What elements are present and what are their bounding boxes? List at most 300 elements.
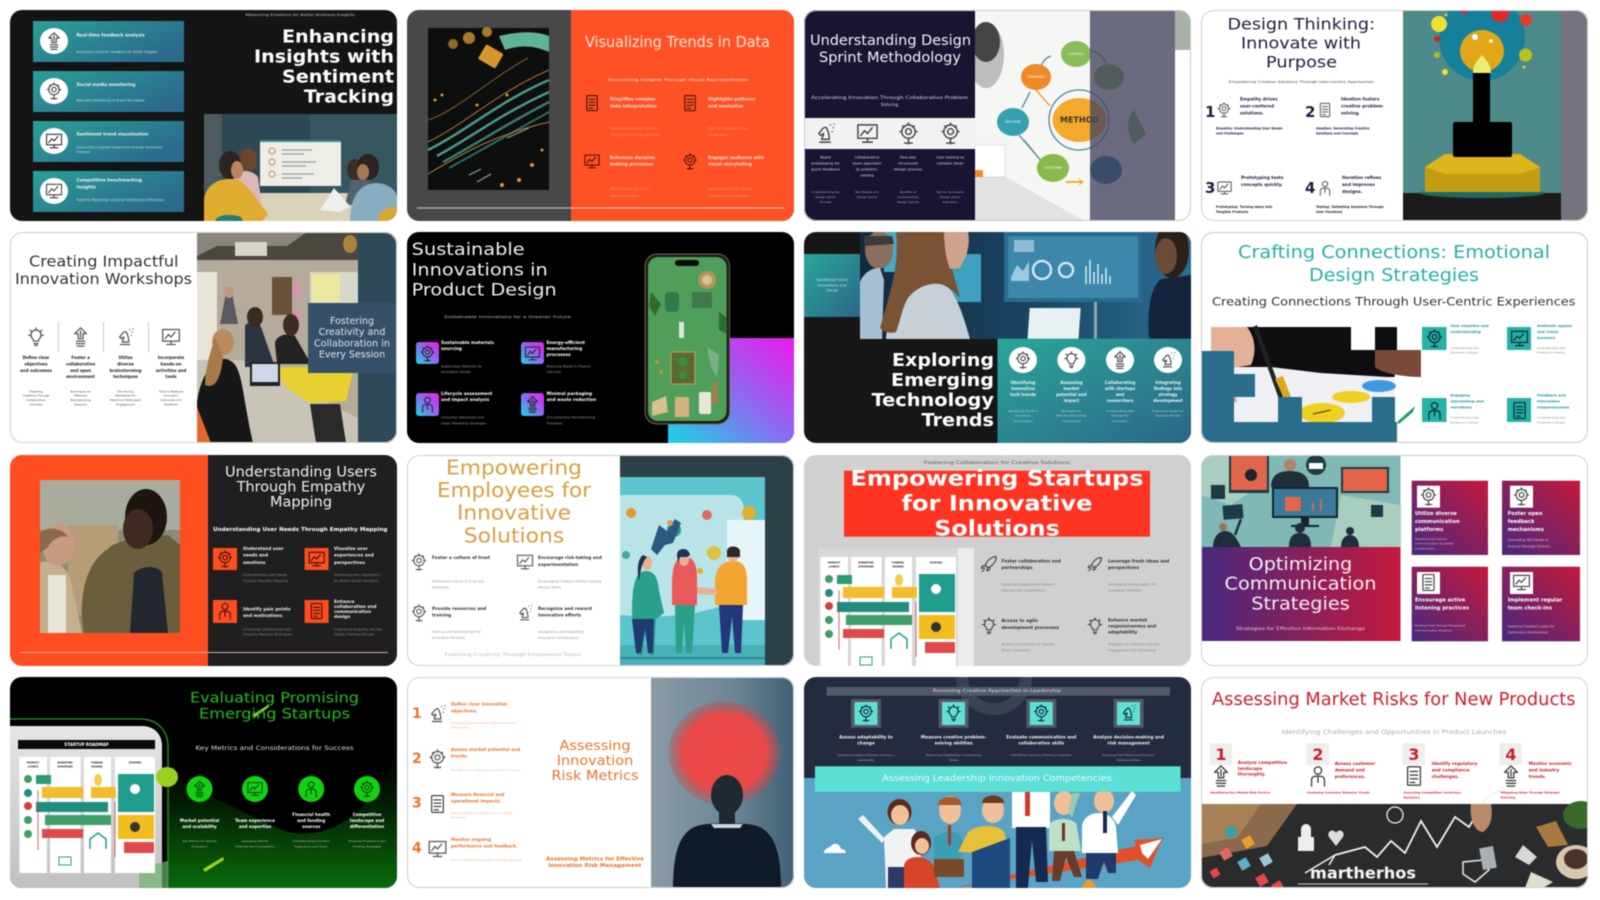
item 2 [235,776,275,849]
roadmap: ROUNDS [892,566,904,568]
item 3: Assessing Competitive Landscape [1404,791,1461,795]
item 1 [1205,96,1283,135]
item 3: collaboration skills [1018,740,1065,746]
item 2: solving. [1341,110,1360,116]
item 2: Effective Technology [1056,414,1087,418]
green wedge background [168,752,397,888]
item 3 [1105,347,1136,423]
item 1: Foster collaboration and [1002,558,1061,564]
item 2: potential and [1056,392,1087,397]
item 4: Enhance [334,599,355,605]
item sublabels: Tips for Successful [935,190,964,194]
item 2: Improve Message Delivery [1508,544,1550,548]
title: Sustainable [412,240,525,260]
item 2: Brainstorming [70,398,91,402]
roadmap: LAUNCH [829,566,839,568]
item 1: tech trends [1010,392,1037,397]
item: real-time feedback analysis: Analyzing Customer Feedback for Better Insights [76,50,157,54]
item 2: 2 [412,751,422,767]
item labels: structured [898,160,918,166]
man green [1049,819,1081,851]
item 3: 3 [1205,179,1215,197]
title: Purpose [1266,52,1337,72]
header bar: Assessing Creative Approaches in Leadership [933,688,1061,694]
item 1: Creativity Through [23,393,50,397]
item 4: 4 [412,841,422,857]
item 4 [1507,394,1570,424]
item 4: responsiveness and [1108,624,1156,630]
title: Risk Metrics [552,768,638,784]
item 4: hands-on [161,362,182,366]
item 4: Feedback and [1537,394,1566,398]
item 1 [1422,324,1489,355]
item 4: differentiation [350,824,384,829]
item 3: Dynamics [1404,795,1420,799]
item sublabels: Design Sprint [940,195,961,199]
item 2: 2 [1305,103,1315,121]
card: Understanding Users Through Empathy Mapping [10,455,397,666]
card: Crafting Connections [1201,232,1588,443]
man white centre [1012,792,1050,828]
title: Assessing Market Risks for New Products [1212,689,1576,710]
item 3: Green Marketing Strategies [441,421,487,425]
item: highlights patterns and anomalies: Highlights patterns [708,96,756,102]
subtitle: Sustainable Innovations for a Greener Future [444,314,572,319]
roadmap panel: STARTING [129,762,141,764]
item 2: experiences and [334,552,374,558]
title: Innovation Workshops [15,270,192,288]
title [872,350,994,431]
item 4: Testing: Validating Solutions Through [1316,205,1384,209]
photo: workshop [197,232,397,443]
item 4: team check-ins [1508,606,1552,612]
item 3: Maximum Participant [110,398,142,402]
item 3: Consumer Awareness and [441,416,484,420]
item 2 [1088,557,1169,592]
item 3 [292,776,330,849]
illustration: light bulb on pedestal [1403,0,1588,221]
title: Assessing [560,738,630,754]
item 4: and improves [1342,182,1375,188]
item: simplifies complex data interpretation [587,96,661,137]
item sublabels: Key Phases of a [855,190,879,194]
photo: method diagram: STARTING [1027,75,1045,79]
title: Employees for [437,478,592,502]
item 3: Building Trust Through Transparent [1415,624,1466,628]
title: Emerging [891,370,994,391]
item 1: Foster a culture of trust [432,555,490,561]
title [190,690,359,722]
callout: teal box: Trends [825,289,838,293]
item 4: Competitive [353,812,381,817]
title: Insights with [254,46,394,68]
photo: man facing red sphere [651,677,794,888]
photo: method diagram: METHOD [1060,116,1099,124]
item 3: Engagement [116,402,136,406]
item: real-time feedback analysis [33,21,184,62]
roadmap panel: PRODUCT [27,762,40,764]
item 3: Encourage active [1415,598,1466,604]
item: enhances decision-making processes [585,155,657,198]
item 2: Assess customer [1335,761,1376,767]
title: Innovative [457,501,571,525]
photo: team at dashboard [860,222,1191,339]
item: engages audience with visual storytelling [684,154,764,198]
item 2: Innovative Solutions [1108,588,1142,592]
item 4: Recognizing and Rewarding [538,630,584,634]
item 1: Assessing Creative Problem-Solving in [837,753,895,757]
title: Product Design [412,281,557,301]
roadmap panel: LAUNCH [28,766,38,768]
item 1: Innovative [1015,414,1031,418]
item 3: Tangible Products [1216,210,1248,214]
item: engages audience with visual storytelling: Interpreting Trends: Visual [708,187,751,191]
item: engages audience with visual storytelling: Engages audience with [708,155,764,161]
item 3: Evaluate communication and [1006,734,1076,740]
item 2 [1307,743,1376,795]
title: Exploring [892,350,994,371]
item 1: Sustainable Materials for [441,365,483,369]
card: Exploring Emerging Technology Trends [804,222,1191,443]
item 2 [518,555,602,589]
item 3: Engaging [1450,394,1470,398]
item: social media monitoring: Real-time Monitoring of Brand Perception [76,98,144,102]
item 1: Startups and Corporations [1002,588,1045,592]
item 3 [1422,394,1484,424]
woman red [904,857,940,888]
item 1: Empathy: Understanding User Needs [1216,127,1283,131]
item: sentiment trend visualization: Enhancing Customer Experience through Sentiment [76,146,163,150]
item 1: partnerships [1002,565,1033,571]
item 4: Fostering Feedback Loops for [1508,625,1555,629]
item 1: and outcomes [20,368,52,373]
subtitle: Key Metrics and Considerations for Success [196,745,354,752]
item 1: Analyze competitive [1238,760,1287,766]
item 2: Key Metrics for Measuring Innovation Success [451,768,520,772]
item 2: Solutions and Concepts [1316,131,1358,135]
title: Optimizing [1249,554,1352,575]
item 1: innovative [1011,386,1035,391]
item 3: 3 [1408,745,1420,764]
item 3 [1412,567,1488,641]
item 4: tools [165,374,177,379]
item 3: with startups [1105,386,1136,391]
item labels: User testing to [936,154,965,160]
item labels: design process [894,166,922,172]
item 1: Through Empathy Mapping [242,579,288,583]
item 2: creative problem- [1341,104,1384,110]
item 3: Identify pain points [243,606,291,612]
man teal [934,831,964,871]
photo: method diagram [968,10,1191,221]
item 1 [412,554,490,589]
item 4: development [1153,398,1183,403]
item 3 [1402,743,1478,799]
item 3: storytelling and [1450,400,1484,404]
item 3: Innovation [1112,419,1128,423]
item 2: processes [546,352,571,358]
subtitle: Solving [881,102,898,108]
item 4: Integrating [1155,380,1181,385]
item 3: Strategies [451,815,467,819]
item 2: Assess market potential and [451,747,520,753]
item 4: activities and [156,368,186,373]
item 1: Define clear [22,355,50,360]
item 2: Leveraging Technology to [1508,538,1549,542]
item 3: Lifecycle assessment [441,391,492,397]
item 3: Training and Development for [431,630,482,634]
item 2 [921,699,986,762]
item: highlights patterns and anomalies: Tools for Effective Trend [707,127,747,131]
item: sentiment trend visualization [33,121,184,162]
item 1: emotions [243,560,266,566]
footer text: Assessing Metrics for Effective [546,856,645,862]
item 3: techniques [113,374,139,379]
item 1: Leadership [858,758,874,762]
card: Assessing Leadership Innovation Competencies [804,645,1191,888]
item 2 [412,747,520,772]
item 4: Recognize and reward [538,606,592,612]
item 1: Identifying Key Market Risk Factors [1210,791,1271,795]
item 1: solutions. [1240,110,1264,116]
item 3: Experience and Vision [295,845,328,849]
item 2: manufacturing [546,346,582,352]
item 3: and motivations [243,613,283,619]
item 4: Emotions in Design [1537,420,1565,424]
item 3: and compliance [1432,768,1470,774]
subtitle: Creating Connections Through User-Centric Experiences [1212,295,1576,309]
roadmap panel: MARKETING [57,762,73,764]
item 1: needs and [243,552,268,558]
item 4 [1088,618,1159,652]
card: Evaluating Promising Emerging Startups [10,677,397,888]
title: Evaluating Promising [190,690,359,706]
callout text: Fostering [330,316,374,327]
item sublabels: Implementing [898,195,919,199]
item 3: researchers [1107,398,1134,403]
item: competitive benchmarking insights [33,171,184,212]
item: sentiment trend visualization: Analysis [76,150,90,154]
item 2: Measure creative problem- [921,734,986,740]
item 3: listening practices [1415,606,1469,612]
item 4: Business Models [1156,414,1181,418]
card: Creating Impactful Innovation Workshops [10,232,397,443]
roadmap: FUNDING [892,562,904,564]
item 4: Minimal packaging [546,391,592,397]
roadmap panel: FUNDING [91,762,103,764]
title [1238,242,1550,286]
item sublabels: Understanding the [812,190,840,194]
item: competitive benchmarking insights: insights [76,184,96,190]
title: Strategies [1251,594,1350,614]
item 4: Iteration refines [1342,175,1382,181]
item 2: Leverage fresh ideas and [1108,558,1169,564]
chalk text: martherhos [1310,864,1416,882]
item 2: Assessing [1060,380,1083,385]
title: Tracking [304,86,394,108]
item 3 [982,618,1059,652]
item sublabels: Design Sprint [815,195,836,199]
item 1: Identifying Trends in [1008,409,1038,413]
item 3: Prototyping: Turning Ideas into [1216,205,1273,209]
item 1 [1210,743,1287,795]
item 1: Innovative Design [441,370,471,374]
item 4: Monitor ongoing [451,837,491,843]
teal band: Assessing Leadership Innovation Competencies [882,774,1112,784]
item 4: findings into [1154,386,1182,391]
item 3: and impact analysis [441,397,490,403]
item 1: Evaluation [192,845,208,849]
item 4: Funding Strategies [353,845,382,849]
card: Visualizing Trends in Data [407,10,794,221]
title: Innovation [557,753,633,769]
roadmap panel: ROUNDS [91,766,103,768]
item 1: Collaborative [26,398,46,402]
photo: chalkboard [1201,789,1599,894]
item 2: perspectives [1108,565,1139,571]
item 3: Balancing Risk and Reward in Innovation [451,811,512,815]
item: sentiment trend visualization: Sentiment trend visualization [76,132,148,138]
title panel [1201,547,1400,641]
item 1: Fostering a Culture of Trust and [432,580,484,584]
item: competitive benchmarking insights: Competitive benchmarking [76,178,142,184]
item 3: Collaborating with [1106,409,1134,413]
subtitle: Empowering Creative Solutions Through User-Centric Approaches [1229,80,1374,84]
title: Mapping [270,495,332,511]
title [552,738,638,784]
item 1: Understanding Innovation Risk Assessment [451,721,517,725]
title: Crafting Connections: Emotional [1238,242,1550,263]
item sublabels: Design Sprints [897,200,919,204]
item 1: objectives [24,362,48,366]
item 1: Empathy drives [1240,96,1278,102]
roadmap: MARKETING [858,562,874,564]
subtitle: Understanding User Needs Through Empathy Mapping [213,527,388,533]
item 1 [412,702,517,729]
title: Technology [872,390,994,411]
item 1: and scalability [182,824,217,829]
item 4: and industry [1529,768,1560,774]
item: simplifies complex data interpretation: Simplifies complex [610,96,656,102]
photo: meeting [204,114,397,221]
item 4: Analyze decision-making and [1093,734,1164,740]
item 4: landscape and [350,818,384,823]
item 4: strategy [1158,392,1178,397]
item 2: impact [1064,398,1079,403]
card: Empowering Employees [407,455,794,666]
title [254,26,394,108]
item 2: Among Teams [538,585,561,589]
roadmap: PRODUCT [828,562,841,564]
item: engages audience with visual storytelling: visual storytelling [708,162,752,168]
card: Empowering Startups [804,455,1191,667]
callout text [314,316,390,360]
title [437,456,592,547]
item: competitive benchmarking insights: Tools for Measuring Customer Satisfaction Effectively [76,198,164,202]
illustration: team on arrow [824,789,1164,888]
item 2: experimentation [538,562,578,568]
item 1: Activities [29,402,43,406]
item 2: environment [66,374,95,379]
item 4: performance and feedback. [451,844,518,850]
item 4: Incorporate [158,355,184,360]
roadmap: STRATEGIES [858,566,874,568]
item 1: Fostering Collaboration Between [1002,582,1055,586]
item 2: Strategies for [1061,409,1082,413]
item 1: landscape [1238,766,1262,772]
item sublabels: Execution [943,200,957,204]
card: Design Thinking [1201,0,1588,221]
title: Emerging Startups [199,706,350,722]
item 4: responsiveness [1537,406,1570,410]
title banner: Solutions [934,516,1060,540]
item 1 [180,776,220,849]
item 2: Encouraging Creative Problem-Solving [538,580,601,584]
item 1: 1 [1205,103,1215,121]
callout text: Collaboration in [314,338,390,350]
item 2: Techniques for [69,389,92,393]
item labels: Rapid [820,154,831,160]
item 3: narratives [1450,406,1473,410]
item 2 [66,328,96,406]
title [225,465,377,511]
card: Assessing Market Risks [1201,677,1599,894]
item 2 [1305,96,1384,135]
item 4: Planning [1500,795,1515,799]
card: Assessing Innovation Risk Metrics [407,677,794,888]
item 2: Potential and Competition [235,845,275,849]
footer text: Innovation Risk Management [548,863,642,869]
item labels: solving [860,172,874,178]
top text: Fostering Collaboration for Creative Solutions [924,460,1071,466]
item 3: Collaborating [1105,380,1135,385]
item 1: Emotions in Design [1450,351,1479,355]
item: simplifies complex data interpretation: Through Visual Representation [609,133,661,137]
roadmap panel [10,719,168,888]
item: enhances decision-making processes: making processes [610,162,654,168]
item 1: Identifying [1011,380,1035,385]
photo: method diagram: OUTCOME [1044,166,1062,170]
photo: method diagram: LEARNED [1068,52,1085,56]
item 2 [521,340,591,374]
item 1: Market potential [180,818,220,823]
item 4 [1093,699,1164,762]
item 3: and funding [297,818,325,823]
item 3: Measure financial and [451,792,504,798]
item 4: collaboration and [334,604,376,610]
subtitle: Strategies for Effective Information Exchange [1236,626,1365,632]
item 4 [1152,347,1184,418]
item 2: Assessment [1062,419,1081,423]
footer text [546,856,645,869]
item 4: design [334,614,350,620]
item 2: Styles [949,758,959,762]
item 3: Communication Practices [1415,628,1452,632]
item 4: and waste reduction [546,397,596,403]
item 1: Key Metrics for Startup [182,839,217,843]
item 3: Innovative Mindsets [432,636,465,640]
item 1 [1008,347,1038,423]
item 2: Foster open [1508,511,1543,517]
item 1: thoroughly. [1238,772,1266,778]
item 4: interaction [1537,400,1560,404]
item 2: and visual [1537,330,1558,334]
title: Visualizing Trends in Data [585,33,770,51]
item 2: feedback [1508,519,1535,525]
divider line [20,652,388,653]
item 4 [1305,175,1384,214]
item 1: and Challenges [1216,131,1244,135]
